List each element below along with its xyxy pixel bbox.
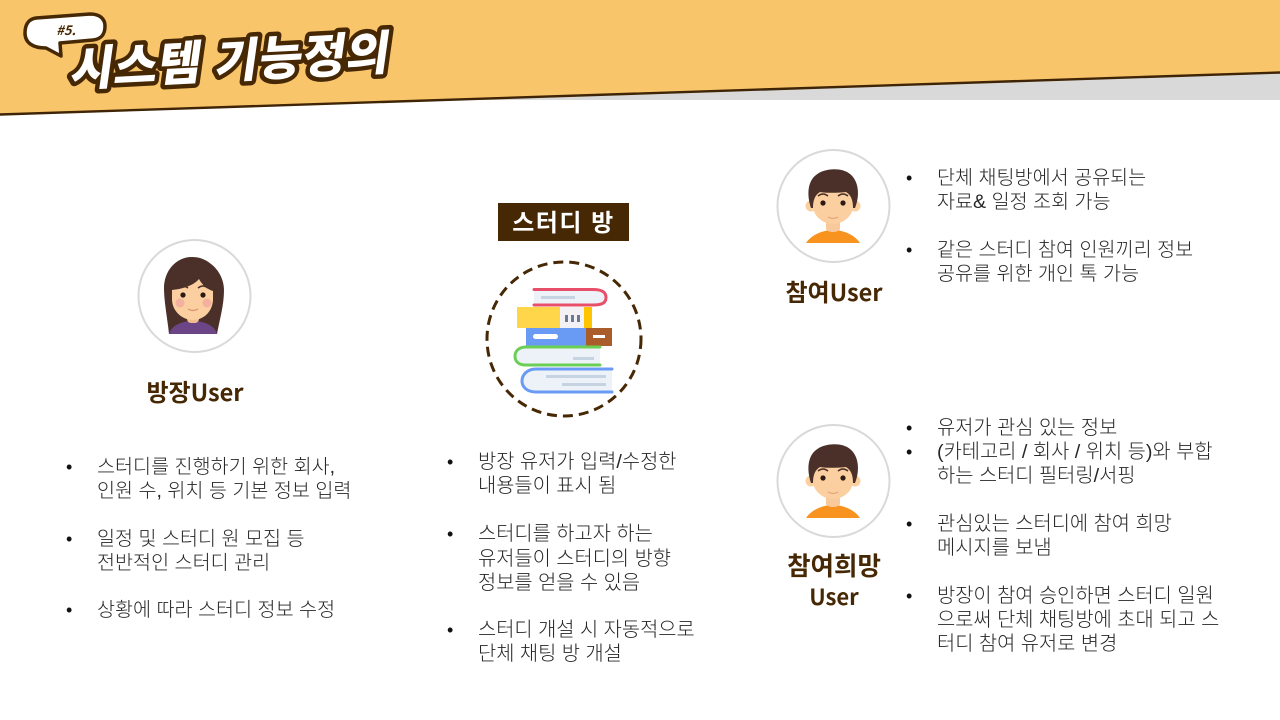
list: study room features: 스터디 개설 시 자동적으로 — [478, 619, 695, 641]
label: participant: 참여User — [785, 273, 883, 308]
list: study room features: 정보를 얻을 수 있음 — [478, 572, 640, 594]
list: room owner features: 인원 수, 위치 등 기본 정보 입력 — [97, 480, 351, 502]
list: prospective participant features: 방장이 참여 승인하면 스터디 일원 — [937, 585, 1214, 607]
list: participant features: 단체 채팅방에서 공유되는 — [937, 167, 1146, 189]
label: prospective participant — [787, 546, 881, 612]
label: prospective participant: 참여희망 — [787, 546, 881, 583]
list: room owner features: 일정 및 스터디 원 모집 등 — [97, 528, 304, 550]
list: study room features: 방장 유저가 입력/수정한 — [478, 451, 676, 473]
list: room owner features: 스터디를 진행하기 위한 회사, — [97, 456, 335, 478]
list: prospective participant features: 유저가 관심 있는 정보 — [937, 417, 1117, 439]
list: prospective participant features: 메시지를 보냄 — [937, 537, 1052, 559]
avatar: participant (man) — [776, 149, 890, 263]
list: study room features — [448, 451, 695, 665]
list: study room features: 단체 채팅 방 개설 — [478, 643, 622, 665]
list: room owner features — [66, 456, 351, 621]
list: prospective participant features: (카테고리 / 회사 / 위치 등)와 부합 — [937, 441, 1213, 463]
list: study room features: 내용들이 표시 됨 — [478, 475, 616, 497]
list: participant features — [906, 167, 1193, 285]
speech bubble tag: #5. — [56, 20, 76, 39]
list: prospective participant features — [906, 417, 1219, 655]
avatar: prospective participant (man) — [776, 424, 890, 538]
list: prospective participant features: 하는 스터디 필터링/서핑 — [937, 465, 1135, 487]
label: room owner: 방장User — [146, 373, 244, 408]
list: prospective participant features: 터디 참여 유저로 변경 — [937, 633, 1117, 655]
heading: study room: 스터디 방 — [512, 203, 615, 238]
label: prospective participant: User — [809, 580, 859, 612]
list: participant features: 공유를 위한 개인 톡 가능 — [937, 263, 1139, 285]
avatar: room owner (woman) — [138, 239, 252, 353]
list: participant features: 자료& 일정 조회 가능 — [937, 191, 1111, 213]
list: prospective participant features: 으로써 단체 채팅방에 초대 되고 스 — [937, 609, 1219, 631]
speech bubble tag — [23, 12, 107, 58]
list: prospective participant features: 관심있는 스터디에 참여 희망 — [937, 513, 1172, 535]
list: study room features: 유저들이 스터디의 방향 — [478, 548, 671, 570]
list: room owner features: 전반적인 스터디 관리 — [97, 552, 270, 574]
header banner — [0, 0, 1280, 116]
list: participant features: 같은 스터디 참여 인원끼리 정보 — [937, 239, 1193, 261]
list: room owner features: 상황에 따라 스터디 정보 수정 — [97, 599, 335, 621]
list: study room features: 스터디를 하고자 하는 — [478, 523, 653, 545]
icon: stack of books — [486, 260, 642, 418]
